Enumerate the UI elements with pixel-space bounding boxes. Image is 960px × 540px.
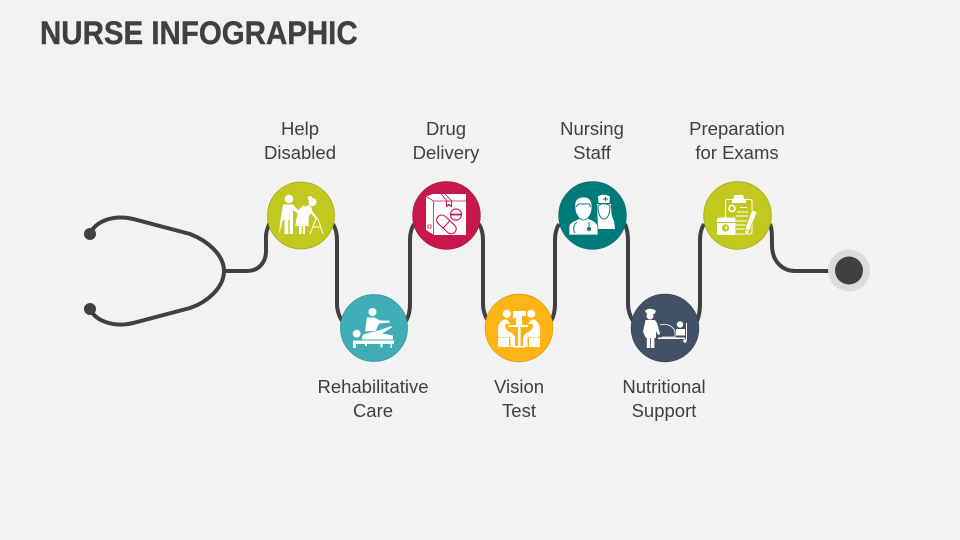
icon: elderly couple with walker — [279, 195, 323, 234]
icon: nurse and patient in bed — [643, 309, 687, 348]
title: NURSE INFOGRAPHIC — [40, 15, 358, 51]
node: Preparation for Exams — [704, 182, 771, 249]
stethoscope headset tube — [90, 217, 224, 325]
label: Nutritional Support — [622, 376, 706, 421]
icon: clipboard, calendar and pencil — [717, 195, 757, 236]
label: Help Disabled: Disabled — [264, 142, 336, 163]
label: Drug Delivery: Delivery — [413, 142, 479, 163]
ear tip top — [84, 228, 96, 240]
label: Nutritional Support: Support — [632, 400, 696, 421]
label: Help Disabled: Help — [281, 118, 319, 139]
node: Drug Delivery — [413, 182, 480, 249]
node: Help Disabled — [268, 182, 334, 249]
icon: therapist and patient on bed — [353, 308, 394, 348]
label: Rehabilitative Care — [317, 376, 429, 421]
icon: doctor and nurse — [569, 195, 615, 235]
label: Drug Delivery — [413, 118, 480, 163]
chest piece — [828, 250, 870, 292]
label: Drug Delivery: Drug — [426, 118, 466, 139]
label: Help Disabled — [264, 118, 336, 163]
ear tip bottom — [84, 303, 96, 315]
label: Nursing Staff — [560, 118, 624, 163]
label: Nutritional Support: Nutritional — [622, 376, 706, 397]
label: Nursing Staff: Staff — [573, 142, 611, 163]
wavy tube — [224, 222, 835, 321]
label: Rehabilitative Care: Rehabilitative — [317, 376, 429, 397]
label: Vision Test: Vision — [494, 376, 544, 397]
node: Nursing Staff — [559, 182, 626, 249]
icon: eye exam at table — [498, 310, 540, 348]
label: Preparation for Exams: for Exams — [695, 142, 779, 163]
node: Nutritional Support — [631, 294, 699, 362]
label: Preparation for Exams — [689, 118, 785, 163]
label: Preparation for Exams: Preparation — [689, 118, 785, 139]
node: Vision Test — [485, 294, 553, 362]
node: Rehabilitative Care — [340, 294, 408, 362]
label: Nursing Staff: Nursing — [560, 118, 624, 139]
label: Rehabilitative Care: Care — [353, 400, 393, 421]
label: Vision Test — [494, 376, 544, 421]
icon: medicine box with pills — [426, 194, 466, 236]
label: Vision Test: Test — [502, 400, 536, 421]
